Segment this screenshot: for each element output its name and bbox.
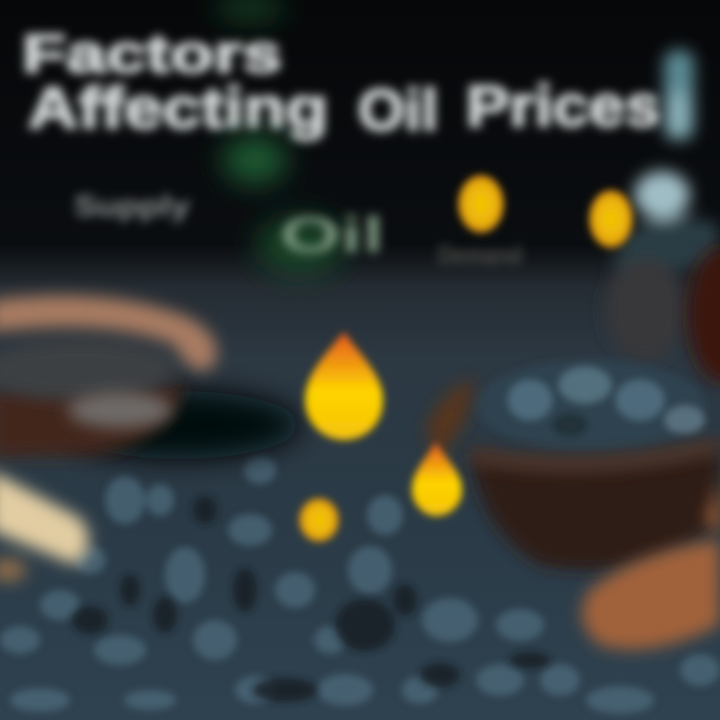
label: small caption under flame: Demand <box>438 240 522 270</box>
title: Affecting <box>28 76 328 141</box>
green herb decoration <box>214 0 344 273</box>
title: Factors <box>22 24 282 84</box>
bowl body <box>470 445 720 570</box>
gravel texture <box>0 456 720 714</box>
icon: flame top right <box>589 190 633 248</box>
spice root bottom right <box>582 480 720 650</box>
left bowl <box>0 295 300 459</box>
title: Prices <box>466 74 661 139</box>
bowl shadow <box>60 391 300 459</box>
icon: large flame <box>305 332 383 440</box>
bowl rim <box>0 295 217 370</box>
bowl body <box>0 385 185 458</box>
label: left caption: Supply <box>74 190 190 223</box>
gravel shadows <box>72 496 550 702</box>
bowl contents <box>0 340 175 400</box>
brown jar at right <box>688 247 720 383</box>
small brown smear near flame <box>425 380 475 460</box>
icon: flame top center <box>458 175 504 233</box>
bowl rim <box>468 438 720 471</box>
right bowl <box>468 360 720 570</box>
title <box>22 24 661 143</box>
label: green caption: Oil <box>280 207 384 263</box>
title: Oil <box>358 78 438 143</box>
glass bottle <box>605 50 720 362</box>
bowl contents <box>475 360 705 450</box>
icon: flame small bottom <box>299 498 339 542</box>
icon: flame medium <box>412 442 462 516</box>
bowl text reflection <box>68 392 172 428</box>
cinnamon stick left <box>0 470 89 582</box>
